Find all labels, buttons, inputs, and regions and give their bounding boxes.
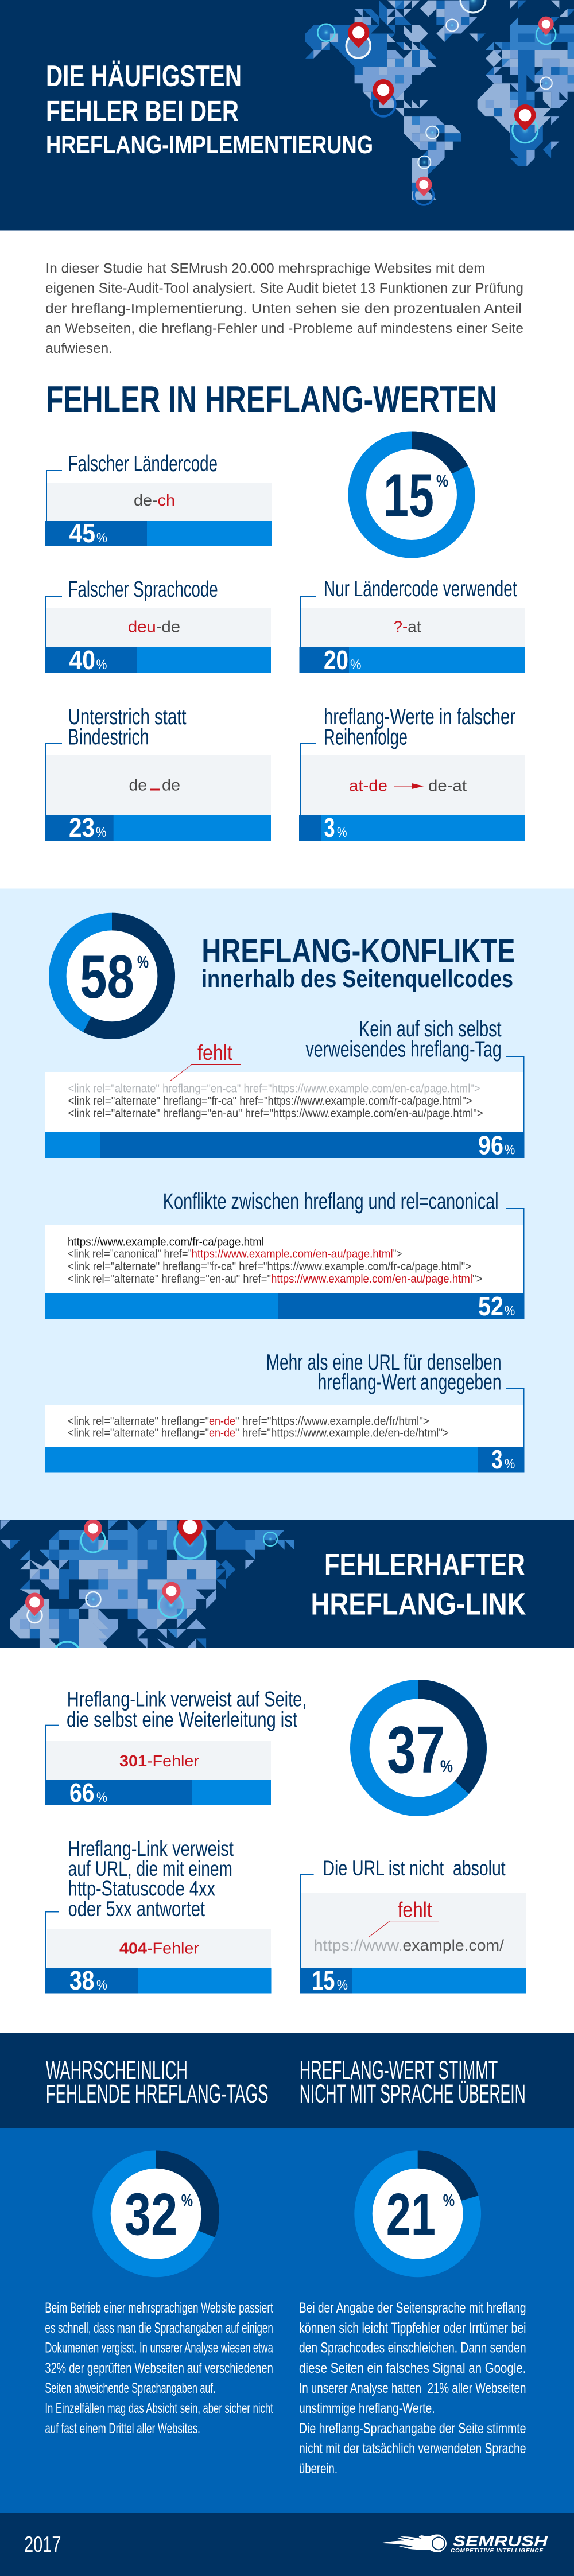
intro text: eigenen Site-Audit-Tool analysiert. Site Audit bietet 13 Funktionen zur Prüfung (45, 281, 523, 296)
map pin small (416, 177, 432, 196)
panel: Falscher Ländercode: Falscher Ländercode (68, 452, 218, 476)
panel: hreflang-Werte in falscher Reihenfolge (299, 705, 525, 842)
header banner (0, 0, 574, 231)
text block: unstimmige Werte (299, 2300, 526, 2477)
text block: unstimmige Werte: unstimmige hreflang-Werte. (299, 2400, 435, 2416)
heading: hreflang-Wert stimmt nicht (300, 2056, 526, 2108)
title: HREFLANG-IMPLEMENTIERUNG (46, 131, 373, 159)
panel: URL nicht absolut: fehlt (398, 1898, 432, 1922)
panel: Weiterleitung: 301-Fehler (119, 1752, 199, 1770)
location rings (317, 0, 556, 205)
panel: hreflang-Werte in falscher Reihenfolge: at-de (349, 777, 387, 794)
arrow (394, 783, 424, 789)
panel: URL nicht absolut: https://www. (314, 1937, 403, 1954)
text block: fehlende Tags: Beim Betrieb einer mehrsprachigen Website passiert (45, 2300, 273, 2316)
panel: hreflang-Werte in falscher Reihenfolge: % (337, 825, 347, 840)
donut: 15%: 15 (383, 461, 434, 530)
panel: Konflikte hreflang und canonical (45, 1190, 525, 1321)
panel: hreflang-Konflikte section (0, 888, 574, 1520)
map pin (348, 22, 369, 48)
panel: Kein selbst verweisendes Tag: 96 (478, 1130, 503, 1160)
panel: hreflang-Werte in falscher Reihenfolge: 3 (324, 813, 335, 842)
panel: Konflikte hreflang und canonical: https://www.example.com/en-au/page.html (271, 1273, 472, 1285)
panel: Nur Ländercode verwendet: ?-at (394, 617, 421, 636)
panel: Weiterleitung: % (96, 1790, 107, 1805)
donut: 15%: % (436, 472, 448, 491)
text block: fehlende Tags: es schnell, dass man die Sprachangaben auf einigen (45, 2320, 273, 2336)
logo: SEMrush (380, 2532, 549, 2554)
title: FEHLER BEI DER (46, 95, 239, 127)
panel: 4xx 5xx: 38 (69, 1965, 94, 1995)
panel: Kein selbst verweisendes Tag (45, 1017, 525, 1160)
year: 2017 (24, 2532, 61, 2557)
banner: Fehlerhafter hreflang-Link (0, 1520, 574, 1648)
panel: Konflikte hreflang und canonical: 52 (478, 1291, 503, 1321)
map pin small (162, 1582, 180, 1604)
donut: 37%: 37 (387, 1712, 445, 1787)
panel: Mehr als eine URL: " href="https://www.example.de/en-de/html"> (235, 1427, 449, 1439)
panel: 4xx 5xx: http-Statuscode 4xx (68, 1876, 215, 1900)
band: two-column headings (0, 2033, 574, 2128)
panel: Falscher Sprachcode: 40 (69, 645, 95, 675)
panel: Nur Ländercode verwendet: 20 (324, 645, 348, 675)
panel: Konflikte hreflang und canonical: <link rel=”canonical” href=” (68, 1248, 192, 1261)
panel: Konflikte hreflang und canonical: <link rel="alternate" hreflang="en-au" href=" (68, 1273, 271, 1285)
text block: fehlende Tags: Seiten abweichende Sprachangaben auf. (45, 2380, 216, 2396)
panel: Falscher Ländercode: % (96, 530, 107, 546)
panel: Falscher Sprachcode: Falscher Sprachcode (68, 577, 218, 602)
panel: Falscher Ländercode: de-ch (134, 491, 175, 509)
intro text: an Webseiten, die hreflang-Fehler und -Probleme auf mindestens einer Seite (45, 321, 523, 336)
donut: 58%: % (137, 953, 149, 972)
section heading: innerhalb des Seitenquellcodes (201, 965, 513, 993)
donut: 21% (354, 2150, 481, 2277)
panel: Falscher Ländercode (45, 452, 272, 548)
panel: Kein selbst verweisendes Tag: verweisendes hreflang-Tag (305, 1037, 502, 1062)
map pin (373, 79, 394, 106)
donut: 15% (348, 432, 475, 558)
panel: 4xx 5xx: Hreflang-Link verweist (68, 1836, 234, 1860)
panel: hreflang-Werte in falscher Reihenfolge: de-at (428, 777, 467, 794)
panel: Kein selbst verweisendes Tag: fehlt (197, 1041, 233, 1064)
panel: Falscher Sprachcode: % (96, 657, 107, 673)
donut: 37% (350, 1680, 487, 1816)
text block: unstimmige Werte: überein. (299, 2461, 338, 2477)
intro text (45, 261, 523, 356)
title (46, 60, 373, 159)
panel: Mehr als eine URL: " href="https://www.example.de/fr/html"> (235, 1415, 429, 1428)
panel: URL nicht absolut: 15 (312, 1965, 335, 1995)
panel: Unterstrich statt Bindestrich: Unterstrich statt (68, 705, 187, 729)
panel: hreflang-Werte in falscher Reihenfolge: Reihenfolge (324, 725, 408, 749)
panel: blue details section (0, 2128, 574, 2513)
title: DIE HÄUFIGSTEN (46, 60, 242, 93)
text block: fehlende Tags: 32% der geprüften Webseiten auf verschiedenen (45, 2360, 273, 2376)
world map graphic (0, 1520, 294, 1648)
panel: Nur Ländercode verwendet (300, 577, 525, 675)
map pin (514, 104, 536, 131)
text block: fehlende Tags: In Einzelfällen mag das Absicht sein, aber sicher nicht (45, 2400, 273, 2416)
banner heading: FEHLERHAFTER (324, 1548, 525, 1582)
panel: Unterstrich statt Bindestrich: % (96, 825, 107, 840)
section heading (201, 933, 515, 993)
panel: URL nicht absolut (300, 1856, 526, 1995)
donut: 37%: % (440, 1757, 453, 1776)
panel: Nur Ländercode verwendet: % (350, 657, 362, 673)
heading: fehlende hreflang-Tags: WAHRSCHEINLICH (46, 2056, 188, 2085)
map pin (178, 1520, 202, 1545)
panel: Mehr als eine URL (45, 1350, 525, 1474)
text block: unstimmige Werte: diese Seiten ein falsches Signal an Google. (299, 2360, 526, 2376)
panel: Konflikte hreflang und canonical: https://www.example.com/fr-ca/page.html (68, 1236, 264, 1249)
panel: Unterstrich statt Bindestrich: de (129, 776, 147, 794)
map pin small (538, 17, 554, 36)
text block: fehlende Tags (45, 2300, 273, 2437)
panel: Weiterleitung (45, 1687, 307, 1808)
panel: Falscher Ländercode: 45 (69, 518, 95, 548)
panel: 4xx 5xx: auf URL, die mit einem (68, 1856, 232, 1880)
panel: Kein selbst verweisendes Tag: Kein auf sich selbst (359, 1017, 502, 1042)
panel: URL nicht absolut: example.com/ (403, 1937, 505, 1954)
footer (0, 2513, 574, 2576)
panel: Unterstrich statt Bindestrich: Bindestrich (68, 725, 149, 749)
panel: URL nicht absolut: Die URL ist nicht absolut (323, 1856, 506, 1880)
panel: 4xx 5xx: % (96, 1977, 107, 1993)
panel: Mehr als eine URL: 3 (491, 1444, 503, 1474)
intro text: In dieser Studie hat SEMrush 20.000 mehrsprachige Websites mit dem (46, 261, 486, 277)
map pin small (25, 1592, 44, 1616)
panel: 4xx 5xx (45, 1836, 271, 1995)
donut: 58% (49, 913, 175, 1039)
text block: fehlende Tags: auf fast einem Drittel aller Websites. (45, 2420, 200, 2437)
panel: Kein selbst verweisendes Tag: % (505, 1143, 515, 1158)
panel: Konflikte hreflang und canonical: ”> (393, 1248, 402, 1261)
panel: Mehr als eine URL: <link rel="alternate" hreflang=" (68, 1427, 209, 1439)
donut: 21%: 21 (386, 2182, 436, 2248)
panel: Weiterleitung: Hreflang-Link verweist auf Seite, (67, 1687, 307, 1711)
panel: Unterstrich statt Bindestrich: 23 (69, 813, 95, 842)
panel: Mehr als eine URL: % (505, 1456, 515, 1472)
panel: 4xx 5xx: 404-Fehler (119, 1939, 199, 1957)
panel: 4xx 5xx: oder 5xx antwortet (68, 1897, 205, 1921)
panel: Mehr als eine URL: en-de (209, 1427, 235, 1439)
panel: Unterstrich statt Bindestrich: de (162, 776, 180, 794)
panel: Weiterleitung: die selbst eine Weiterleitung ist (67, 1707, 297, 1731)
panel: Konflikte hreflang und canonical: % (505, 1303, 515, 1319)
intro text: der hreflang-Implementierung. Unten sehen sie den prozentualen Anteil (45, 301, 522, 317)
panel: Konflikte hreflang und canonical: "> (472, 1273, 483, 1285)
donut: 32% (92, 2150, 219, 2277)
panel: Konflikte hreflang und canonical: <link rel="alternate" hreflang="fr-ca" href="https://www.example.com/fr-ca/page.html"> (68, 1260, 471, 1273)
donut: 21%: % (443, 2191, 455, 2210)
panel: Kein selbst verweisendes Tag: <link rel="alternate" hreflang="en-au" href="https://www.example.com/en-au/page.html"> (68, 1108, 483, 1120)
donut: 58%: 58 (80, 942, 134, 1011)
world map graphic (305, 0, 574, 205)
panel: Falscher Sprachcode (45, 577, 271, 675)
location rings (26, 1531, 278, 1648)
panel: Kein selbst verweisendes Tag: <link rel="alternate" hreflang="en-ca" href="https://www.example.com/en-ca/page.html"> (68, 1083, 480, 1095)
heading: fehlende hreflang-Tags: FEHLENDE HREFLANG-TAGS (46, 2079, 268, 2108)
logo: SEMrush: COMPETITIVE INTELLIGENCE (451, 2548, 543, 2554)
panel: Unterstrich statt Bindestrich (45, 705, 271, 842)
panel: Kein selbst verweisendes Tag: <link rel="alternate" hreflang="fr-ca" href="https://www.example.com/fr-ca/page.html"> (68, 1095, 472, 1108)
banner heading (311, 1548, 526, 1622)
banner heading: HREFLANG-LINK (311, 1587, 526, 1622)
donut: 32%: % (181, 2191, 193, 2210)
panel: Mehr als eine URL: en-de (209, 1415, 235, 1428)
heading: fehlende hreflang-Tags (46, 2056, 268, 2108)
panel: Mehr als eine URL: <link rel="alternate" hreflang=" (68, 1415, 209, 1428)
donut: 32%: 32 (125, 2182, 177, 2248)
intro text: aufwiesen. (45, 341, 113, 356)
panel: Konflikte hreflang und canonical: https://www.example.com/en-au/page.html (192, 1248, 393, 1261)
panel: Mehr als eine URL: hreflang-Wert angegeben (318, 1370, 502, 1395)
panel: Weiterleitung: 66 (69, 1778, 94, 1808)
text block: fehlende Tags: Dokumenten vergisst. In unserer Analyse wiesen etwa (45, 2340, 273, 2356)
panel: hreflang-Werte in falscher Reihenfolge: hreflang-Werte in falscher (324, 705, 515, 729)
panel: Falscher Sprachcode: deu-de (128, 617, 180, 636)
panel: URL nicht absolut: % (337, 1977, 348, 1993)
map pin small (84, 1520, 102, 1542)
logo: SEMrush: SEMRUSH (453, 2532, 549, 2550)
